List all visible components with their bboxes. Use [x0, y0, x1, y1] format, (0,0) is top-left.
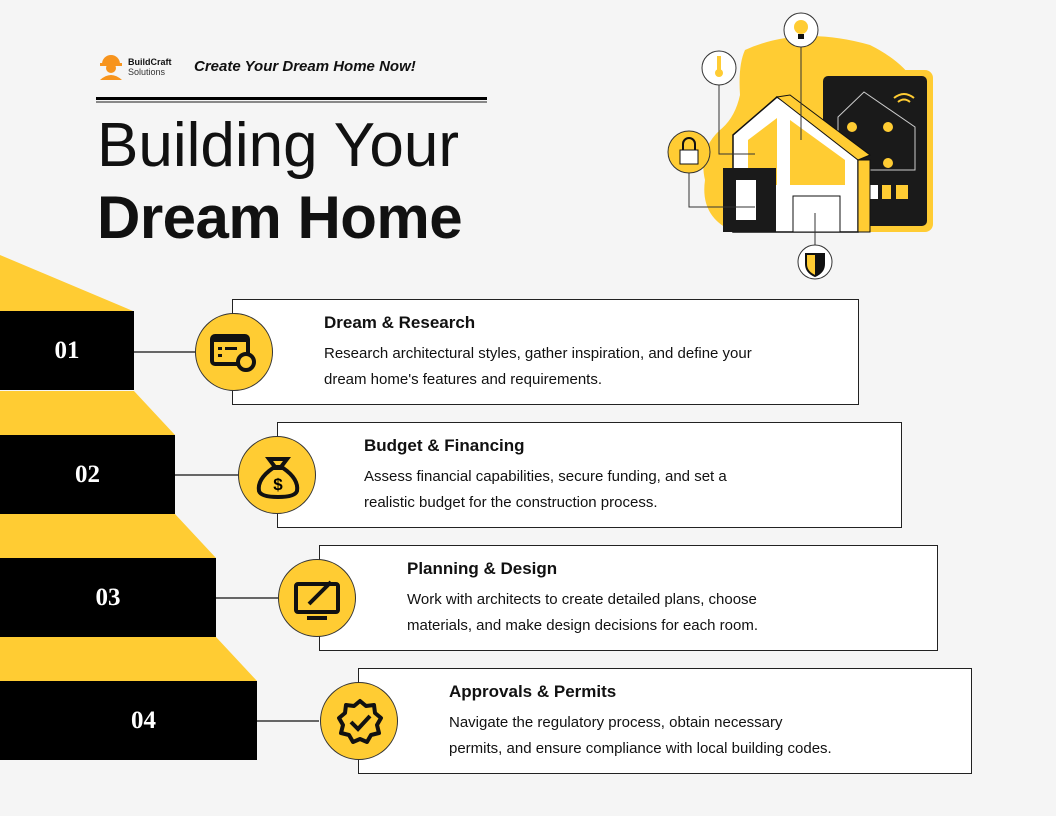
- icon: design monitor: [278, 559, 356, 637]
- step 01: Research architectural styles, gather inspiration, and define your: [324, 345, 752, 362]
- step 03: materials, and make design decisions for each room.: [407, 617, 758, 634]
- logo: BuildCraft: [128, 57, 172, 67]
- title: Building Your: [97, 111, 459, 180]
- step 04: 04: [131, 707, 156, 734]
- step 01: 01: [54, 337, 80, 364]
- step 01: Dream & Research: [324, 313, 475, 332]
- step 04: Navigate the regulatory process, obtain necessary: [449, 714, 783, 731]
- icon: money bag: [238, 436, 316, 514]
- step 02: [0, 422, 902, 528]
- step 04: [0, 668, 972, 774]
- step 04: Approvals & Permits: [449, 682, 616, 701]
- title: Dream Home: [97, 184, 462, 251]
- step 03: Planning & Design: [407, 559, 557, 578]
- tagline: Create Your Dream Home Now!: [194, 58, 416, 75]
- logo: [100, 55, 172, 80]
- icon: badge check: [320, 682, 398, 760]
- illustration: smart home: [668, 12, 933, 280]
- step 02: Assess financial capabilities, secure funding, and set a: [364, 468, 727, 485]
- step 02: 02: [75, 461, 100, 488]
- step 01: [0, 299, 859, 405]
- step 02: Budget & Financing: [364, 436, 525, 455]
- title: [97, 111, 462, 251]
- step 04: permits, and ensure compliance with local building codes.: [449, 740, 832, 757]
- step 03: Work with architects to create detailed plans, choose: [407, 591, 757, 608]
- step 03: 03: [96, 584, 120, 611]
- staircase: [0, 255, 257, 681]
- logo: Solutions: [128, 67, 165, 77]
- icon: money bag: $: [273, 475, 283, 494]
- step 03: [0, 545, 938, 651]
- step 02: realistic budget for the construction process.: [364, 494, 657, 511]
- step 01: dream home's features and requirements.: [324, 371, 602, 388]
- icon: research: [195, 313, 273, 391]
